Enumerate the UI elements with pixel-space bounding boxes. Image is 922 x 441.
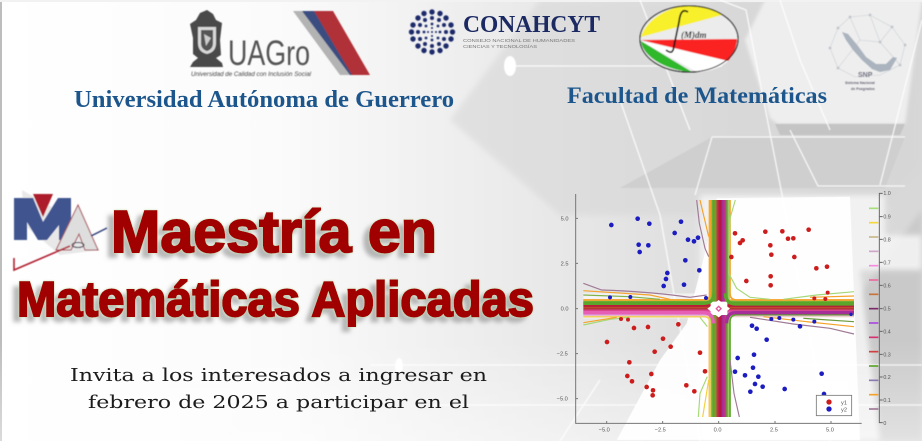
letter A [56,205,98,250]
icon: UAGro eagle shield [190,10,223,67]
outer contour lines [583,200,854,417]
logo: UAGro [190,10,370,78]
legend: y2 [841,407,847,413]
legend: y1 [841,400,847,406]
plot white wedges [583,197,860,440]
blue points y2 [608,216,853,396]
integral symbol [666,11,688,52]
axis tick labels: −5.0 [599,428,610,434]
ring [72,242,84,248]
axis tick labels: 0.0 [714,428,722,434]
axis tick labels [557,216,834,434]
logo: CONAHCYT dotted circle [409,9,455,55]
colour bar: 0 [883,421,886,427]
UAGro tricolour stripes [293,11,370,75]
logo: Maestría MA monogram [14,190,107,270]
SNP caption: de Posgrados [851,87,875,91]
red points y1 [605,227,830,398]
SNP caption [845,81,875,91]
axis tick labels: 0.0 [561,307,569,313]
letter M [14,198,71,240]
centre diamond [707,300,730,317]
heading: Universidad Autónoma de Guerrero: Universidad Autónoma de Guerrero [74,87,454,113]
map of Mexico [842,32,897,72]
red triangle [33,194,53,217]
UAGro wordmark: UAGro [228,34,310,73]
colour bar: 0.5 [883,306,891,312]
CONAHCYT subtitle [463,38,575,49]
SNP label: SNP [858,72,873,79]
title: Matemáticas Aplicadas [17,273,534,327]
colour bar: 0.2 [883,375,891,381]
CONAHCYT wordmark: CONAHCYT [463,12,600,38]
network [829,14,906,77]
colour bar: 0.9 [883,214,891,220]
integral expression: (M)dm [681,30,706,40]
colour bar: 0.7 [883,260,891,266]
CONAHCYT subtitle: CONSEJO NACIONAL DE HUMANIDADES [463,38,575,43]
UAGro tagline: Universidad de Calidad con Inclusión Social [191,71,311,78]
title [17,199,534,327]
colour bar: 1.0 [883,191,891,197]
chart: decision contour scatter plot [557,191,891,440]
axis tick labels: −2.5 [557,352,568,358]
axis tick labels: −5.0 [557,397,568,403]
axes [576,194,862,423]
logo: SNP network map [829,14,906,91]
baseline swoosh [14,246,70,270]
CONAHCYT subtitle: CIENCIAS Y TECNOLOGÍAS [463,44,537,49]
contour corners [583,200,854,417]
title: Maestría en [111,199,437,265]
axis tick labels: 2.5 [561,261,569,267]
colour bar: 0.3 [883,352,891,358]
heading: Facultad de Matemáticas: Facultad de Matemáticas [567,83,827,108]
logo: Facultad de Matemáticas emblem [640,6,738,72]
invitation text [70,365,487,413]
colour bar [869,191,891,427]
SNP caption: Sistema Nacional [845,81,875,85]
axis tick labels: 5.0 [561,216,569,222]
invitation text: Invita a los interesados a ingresar en [70,365,487,386]
colour bar: 0.6 [883,283,891,289]
invitation text: febrero de 2025 a participar en el [88,392,469,413]
dark accent line [91,228,107,236]
colour bar: 0.4 [883,329,891,335]
legend [816,395,852,416]
colour bar: 0.8 [883,237,891,243]
colour bar: 0.1 [883,398,891,404]
axis tick labels: −2.5 [655,428,666,434]
contour bands [583,200,854,417]
axis tick labels: 2.5 [770,428,778,434]
axis tick labels: 5.0 [826,428,834,434]
